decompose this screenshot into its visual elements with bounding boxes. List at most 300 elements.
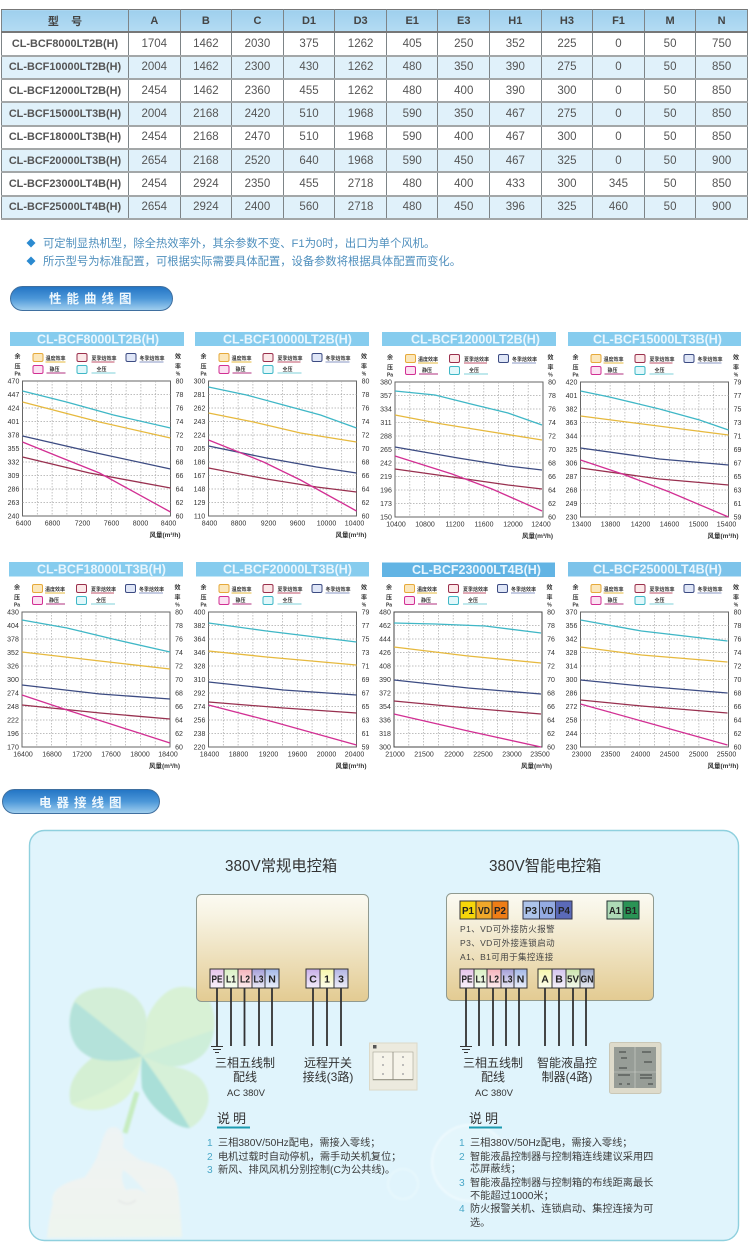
right axis labels: 80	[547, 610, 555, 616]
smart box notes: P3、VD可外接连锁启动	[460, 938, 555, 948]
legend	[32, 584, 164, 604]
legend: 静压	[49, 597, 59, 604]
terminals: conventional power: PE	[212, 974, 222, 986]
spec table: 50	[664, 201, 676, 213]
x axis labels: 23000	[502, 752, 522, 758]
right axis labels: 78	[176, 392, 183, 399]
left axis labels: 288	[380, 434, 392, 440]
label: three-phase five-wire: AC 380V	[475, 1088, 514, 1099]
right axis labels: 68	[734, 690, 741, 698]
spec table: 1968	[348, 155, 373, 167]
chart: CL-BCF15000LT3B(H)	[566, 332, 741, 540]
x axis labels: 18000	[130, 752, 150, 758]
right axis labels: 79	[734, 380, 741, 386]
notes: smart box: 4	[459, 1204, 465, 1215]
legend: 温度效率	[232, 586, 252, 593]
axis titles: Pa	[572, 602, 579, 608]
left axis labels: 355	[8, 446, 19, 453]
axis titles: 压	[386, 594, 392, 602]
left axis labels: 382	[566, 406, 577, 414]
spec table: 510	[299, 131, 319, 143]
left axis labels: 272	[566, 704, 577, 711]
left axis labels: 370	[566, 610, 577, 616]
x axis labels: 20400	[345, 752, 364, 758]
spec table: 480	[403, 85, 422, 97]
spec table: 50	[664, 38, 676, 50]
x axis labels: 9600	[290, 520, 305, 528]
spec table: 1462	[193, 85, 219, 97]
spec table: 390	[506, 61, 525, 73]
notes: smart box: 防火报警关机、连锁启动、集控连接为可	[470, 1202, 653, 1215]
spec table: CL-BCF15000LT3B(H)	[9, 108, 121, 120]
legend: 夏季焓效率	[91, 586, 116, 593]
legend: 温度效率	[418, 356, 438, 363]
smart box notes: A1、B1可用于集控连接	[460, 952, 554, 962]
right axis labels: 64	[548, 488, 556, 494]
notes: smart box	[459, 1111, 653, 1229]
x axis labels: 8400	[161, 520, 176, 528]
decoration: hand holding clover	[47, 987, 508, 1238]
left axis labels: 306	[566, 460, 577, 468]
spec table: 325	[557, 201, 576, 213]
left axis labels	[194, 378, 205, 520]
spec table: 2004	[141, 61, 167, 73]
x axis labels: 18800	[229, 752, 248, 758]
axis titles: 效	[175, 352, 181, 360]
right axis labels: 66	[175, 704, 183, 711]
notes: smart box: 智能液晶控制器与控制箱的布线距离最长	[470, 1176, 653, 1189]
spec table: 325	[557, 155, 576, 167]
left axis labels: 318	[379, 731, 391, 738]
left axis labels: 300	[566, 677, 577, 684]
spec table: CL-BCF10000LT2B(H)	[9, 61, 121, 73]
section heading: wiring diagram: 电器接线图	[39, 795, 127, 810]
spec table: 350	[454, 108, 473, 120]
legend: 夏季焓效率	[278, 355, 303, 362]
x axis labels	[572, 522, 736, 528]
spec table: 640	[299, 155, 319, 167]
curves	[22, 620, 170, 743]
right axis labels: 72	[176, 432, 183, 440]
axis titles	[14, 352, 181, 378]
terminals: smart controller: A	[541, 974, 549, 986]
spec table: 400	[454, 85, 473, 97]
right axis labels: 67	[362, 690, 369, 698]
chart title: CL-BCF20000LT3B(H)	[223, 562, 352, 576]
right axis labels: 71	[362, 664, 369, 670]
left axis labels: 196	[7, 731, 19, 738]
axis titles	[572, 584, 739, 608]
right axis labels	[176, 378, 183, 520]
label: three-phase five-wire: 三相五线制	[463, 1056, 523, 1070]
spec table: 396	[506, 201, 525, 213]
right axis labels: 64	[734, 718, 741, 724]
right axis labels: 64	[547, 718, 555, 724]
right axis labels: 78	[734, 623, 741, 630]
left axis labels: 470	[8, 378, 19, 386]
axis titles: 率	[361, 594, 367, 602]
right axis labels: 61	[734, 501, 741, 508]
right axis labels: 62	[176, 500, 183, 507]
panel background	[30, 830, 738, 1240]
spec table: 50	[664, 131, 676, 143]
legend	[219, 354, 351, 374]
terminals: remote switch: 1	[324, 974, 330, 986]
spec table: 300	[557, 178, 576, 190]
right axis labels: 65	[362, 704, 369, 711]
right axis labels: 74	[734, 650, 741, 657]
left axis labels: 401	[566, 393, 577, 400]
spec table: 1262	[348, 85, 373, 97]
top terminals: fire alarm: P2	[494, 905, 506, 917]
right axis labels: 63	[734, 488, 741, 494]
left axis labels: 300	[7, 677, 19, 684]
left axis labels: 230	[566, 514, 577, 522]
left axis labels: 224	[194, 432, 205, 440]
notes: smart box: 说明	[469, 1111, 501, 1126]
wires: smart power with ground	[460, 988, 519, 1052]
label: three-phase five-wire: 三相五线制	[215, 1056, 275, 1070]
x axis labels: 7200	[75, 520, 90, 528]
left axis labels: 390	[379, 677, 391, 684]
terminals: remote switch: C	[309, 974, 317, 986]
top terminals: interlock	[523, 901, 572, 919]
left axis labels: 274	[7, 690, 19, 698]
label: smart LCD controller: 制器(4路)	[542, 1069, 592, 1084]
left axis labels: 286	[566, 690, 577, 698]
spec table: 433	[506, 178, 525, 190]
notes: conventional box	[207, 1111, 401, 1176]
right axis labels: 75	[734, 406, 741, 414]
left axis labels: 342	[566, 636, 577, 644]
legend	[33, 354, 165, 374]
left axis labels: 170	[7, 744, 19, 752]
left axis labels: 249	[566, 501, 577, 508]
right axis labels: 67	[734, 460, 741, 468]
axis titles: 压	[387, 364, 393, 372]
spec table: 2360	[245, 85, 270, 97]
x axis labels	[16, 520, 176, 528]
right axis labels: 64	[176, 486, 183, 494]
wires: remote switch	[313, 988, 341, 1046]
terminals: conventional power: L3	[254, 974, 264, 986]
axis titles: %	[547, 602, 552, 608]
x axis labels: 11200	[446, 522, 465, 528]
notes: smart box: 1	[459, 1138, 465, 1149]
left axis labels: 268	[566, 488, 577, 494]
left axis labels: 444	[379, 636, 391, 644]
legend: 冬季焓效率	[326, 586, 351, 593]
plot area	[580, 382, 728, 517]
spec table: 450	[454, 155, 473, 167]
left axis labels: 129	[194, 500, 205, 507]
left axis labels: 352	[7, 650, 19, 657]
left axis labels: 314	[566, 664, 577, 670]
x axis labels: 13400	[572, 522, 591, 528]
legend: 夏季焓效率	[464, 356, 489, 363]
axis titles: Pa	[200, 372, 207, 378]
x axis labels: 21500	[414, 752, 434, 758]
legend: 全压	[468, 597, 478, 604]
left axis labels: 240	[8, 514, 19, 520]
x axis labels: 6400	[16, 520, 31, 528]
right axis labels: 75	[362, 636, 369, 644]
left axis labels	[566, 380, 577, 522]
left axis labels: 309	[8, 473, 19, 480]
x axis labels: 22500	[473, 752, 493, 758]
chart title: CL-BCF18000LT3B(H)	[37, 562, 166, 576]
x axis labels: 10400	[386, 522, 406, 528]
x axis labels	[202, 520, 364, 528]
spec table: 2004	[141, 108, 167, 120]
spec table: H3	[560, 15, 574, 27]
left axis labels: 332	[8, 460, 19, 466]
left axis labels: 404	[7, 623, 19, 630]
right axis labels: 59	[734, 514, 741, 522]
x axis labels: 13800	[601, 522, 620, 528]
right axis labels: 74	[362, 419, 369, 426]
right axis labels: 76	[362, 406, 369, 412]
label: remote switch wiring	[303, 1055, 353, 1084]
axis titles: 效	[546, 584, 553, 592]
spec table: 850	[712, 108, 731, 120]
left axis labels	[380, 380, 392, 522]
spec table: 2718	[348, 201, 373, 213]
left axis labels	[8, 378, 19, 520]
spec table: 467	[506, 155, 525, 167]
spec table: 1462	[193, 38, 219, 50]
right axis labels: 70	[175, 677, 183, 684]
chart title: CL-BCF15000LT3B(H)	[593, 332, 722, 346]
legend: 静压	[421, 597, 431, 604]
legend: 冬季焓效率	[698, 586, 723, 593]
legend: 全压	[654, 367, 665, 374]
x axis labels: 18400	[158, 752, 178, 758]
spec table: 2520	[245, 155, 270, 167]
axis titles: 率	[361, 362, 367, 370]
smart box notes	[460, 924, 555, 962]
axis titles: %	[175, 602, 180, 608]
section heading: performance curves	[10, 286, 172, 310]
axis titles: %	[734, 602, 739, 608]
chart title: CL-BCF10000LT2B(H)	[223, 332, 352, 346]
spec table: 2030	[245, 38, 270, 50]
left axis labels: 364	[194, 636, 205, 644]
axis titles: 效	[361, 352, 367, 360]
label: smart LCD controller	[537, 1055, 597, 1084]
legend: 温度效率	[604, 356, 624, 363]
spec table: 0	[615, 38, 622, 50]
right axis labels: 76	[548, 406, 556, 414]
x axis title: 风量(m³/h)	[335, 531, 366, 539]
left axis labels: 328	[194, 664, 205, 670]
left axis labels: 258	[566, 718, 577, 724]
smart control box	[446, 894, 654, 1000]
spec table: 0	[615, 61, 622, 73]
axis titles: 压	[200, 594, 207, 602]
right axis labels: 74	[547, 650, 555, 657]
x axis labels: 23000	[572, 752, 591, 758]
left axis labels: 243	[194, 419, 205, 426]
left axis labels	[194, 610, 205, 752]
x axis labels: 17600	[101, 752, 121, 758]
left axis labels: 401	[8, 419, 19, 426]
right axis labels: 62	[734, 731, 741, 738]
spec table: 50	[664, 178, 676, 190]
axis titles	[387, 354, 554, 378]
notes: conventional box: 1	[207, 1138, 213, 1149]
spec table: 2168	[193, 108, 219, 120]
x axis labels: 9200	[261, 520, 276, 528]
axis titles: 效	[174, 584, 181, 592]
x axis labels: 14200	[631, 522, 650, 528]
left axis labels: 378	[8, 432, 19, 440]
spec table: 400	[454, 131, 473, 143]
spec table: 0	[615, 108, 622, 120]
legend: 温度效率	[417, 586, 437, 593]
wires: smart controller	[545, 988, 586, 1046]
x axis labels: 15000	[689, 522, 708, 528]
notes: smart box: 智能液晶控制器与控制箱连线建议采用四	[470, 1150, 653, 1163]
terminals: conventional power	[210, 969, 279, 988]
spec table: 2454	[141, 178, 167, 190]
right axis labels: 65	[734, 474, 741, 481]
right axis labels: 66	[547, 704, 555, 711]
spec table: 2400	[245, 201, 270, 213]
right axis labels: 72	[362, 432, 369, 440]
x axis labels: 10800	[415, 522, 435, 528]
spec table: 430	[299, 61, 319, 73]
left axis labels: 222	[7, 718, 19, 724]
chart title: CL-BCF25000LT4B(H)	[593, 562, 722, 576]
legend	[406, 354, 537, 374]
right axis labels	[548, 380, 556, 522]
axis titles: 余	[572, 584, 579, 592]
x axis labels: 16400	[13, 752, 33, 758]
notes: conventional box: 电机过载时自动停机，需手动关机复位；	[218, 1150, 401, 1163]
notes: smart box: 选。	[470, 1216, 490, 1229]
plot area	[395, 382, 543, 517]
chart: CL-BCF10000LT2B(H)	[194, 332, 369, 539]
spec table: 0	[615, 131, 622, 143]
right axis labels: 60	[734, 744, 741, 752]
top terminals: interlock: P4	[558, 905, 570, 917]
spec table: 275	[557, 108, 576, 120]
spec table: 0	[615, 85, 622, 97]
spec table: CL-BCF8000LT2B(H)	[12, 38, 118, 50]
left axis labels: 300	[194, 378, 205, 386]
left axis labels: 424	[8, 406, 19, 412]
left axis labels	[379, 610, 391, 752]
spec table: 225	[557, 38, 576, 50]
terminals: smart power: PE	[462, 974, 472, 986]
legend: 夏季焓效率	[278, 586, 303, 593]
left axis labels: 400	[194, 610, 205, 616]
legend: 静压	[422, 367, 432, 374]
x axis labels: 17200	[72, 752, 92, 758]
legend: 冬季焓效率	[326, 355, 351, 362]
right axis labels: 68	[547, 690, 555, 698]
x axis labels	[385, 752, 550, 758]
x axis labels: 20000	[317, 752, 336, 758]
left axis labels: 408	[379, 664, 391, 670]
spec table: 400	[454, 178, 473, 190]
left axis labels: 281	[194, 392, 205, 399]
top terminals: fire alarm	[460, 901, 508, 919]
axis titles: 余	[200, 352, 207, 360]
label: three-phase five-wire: 配线	[481, 1070, 505, 1084]
legend: 全压	[654, 597, 665, 604]
left axis labels: 265	[380, 447, 392, 454]
bullet notes: 所示型号为标准配置，可根据实际需要具体配置，设备参数将根据具体配置而变化。	[43, 254, 461, 268]
left axis labels: 287	[566, 474, 577, 481]
legend	[219, 584, 351, 604]
x axis labels: 23500	[530, 752, 550, 758]
chart: CL-BCF18000LT3B(H)	[7, 562, 183, 770]
x axis labels	[13, 752, 178, 758]
left axis labels: 356	[566, 623, 577, 630]
axis titles: 效	[361, 584, 367, 592]
top terminals: interlock: VD	[542, 905, 554, 917]
left axis labels: 328	[566, 650, 577, 657]
spec table: 450	[454, 201, 473, 213]
spec table: 2454	[141, 85, 167, 97]
spec table: 0	[615, 155, 622, 167]
left axis labels: 354	[379, 704, 391, 711]
panel: wiring diagram	[30, 830, 738, 1240]
legend: 冬季焓效率	[512, 356, 537, 363]
right axis labels: 78	[547, 623, 555, 630]
curves	[208, 623, 356, 745]
label: three-phase five-wire	[463, 1056, 523, 1099]
axis titles: 率	[547, 364, 554, 372]
x axis labels: 24000	[631, 752, 650, 758]
terminals: smart controller: B	[555, 974, 563, 986]
x axis labels	[386, 522, 551, 528]
left axis labels: 219	[380, 474, 392, 481]
x axis title: 风量(m³/h)	[335, 762, 366, 770]
spec table: 455	[299, 178, 319, 190]
left axis labels: 310	[194, 677, 205, 684]
left axis labels: 148	[194, 486, 205, 494]
spec table: 510	[299, 108, 319, 120]
notes: conventional box: 说明	[217, 1111, 249, 1126]
legend: 冬季焓效率	[511, 586, 536, 593]
right axis labels: 80	[548, 380, 556, 386]
top terminals: interlock: P3	[525, 905, 537, 917]
plot area	[208, 612, 356, 747]
left axis labels: 430	[7, 610, 19, 616]
spec table: 590	[403, 108, 422, 120]
x axis labels: 23500	[601, 752, 620, 758]
terminals: smart power: L1	[476, 974, 486, 986]
x axis labels: 24500	[660, 752, 679, 758]
right axis labels: 61	[362, 731, 369, 738]
axis titles: 压	[200, 364, 207, 370]
left axis labels: 325	[566, 447, 577, 454]
chart: CL-BCF20000LT3B(H)	[194, 562, 369, 770]
spec table: 1262	[348, 38, 373, 50]
axis titles	[200, 584, 367, 608]
spec table: 850	[712, 131, 731, 143]
left axis labels: 242	[380, 460, 392, 468]
right axis labels: 74	[175, 650, 183, 657]
spec table: 2168	[193, 155, 219, 167]
spec table: E1	[405, 15, 419, 27]
spec table: 1968	[348, 108, 373, 120]
spec table: 480	[403, 61, 422, 73]
left axis labels: 230	[566, 744, 577, 752]
